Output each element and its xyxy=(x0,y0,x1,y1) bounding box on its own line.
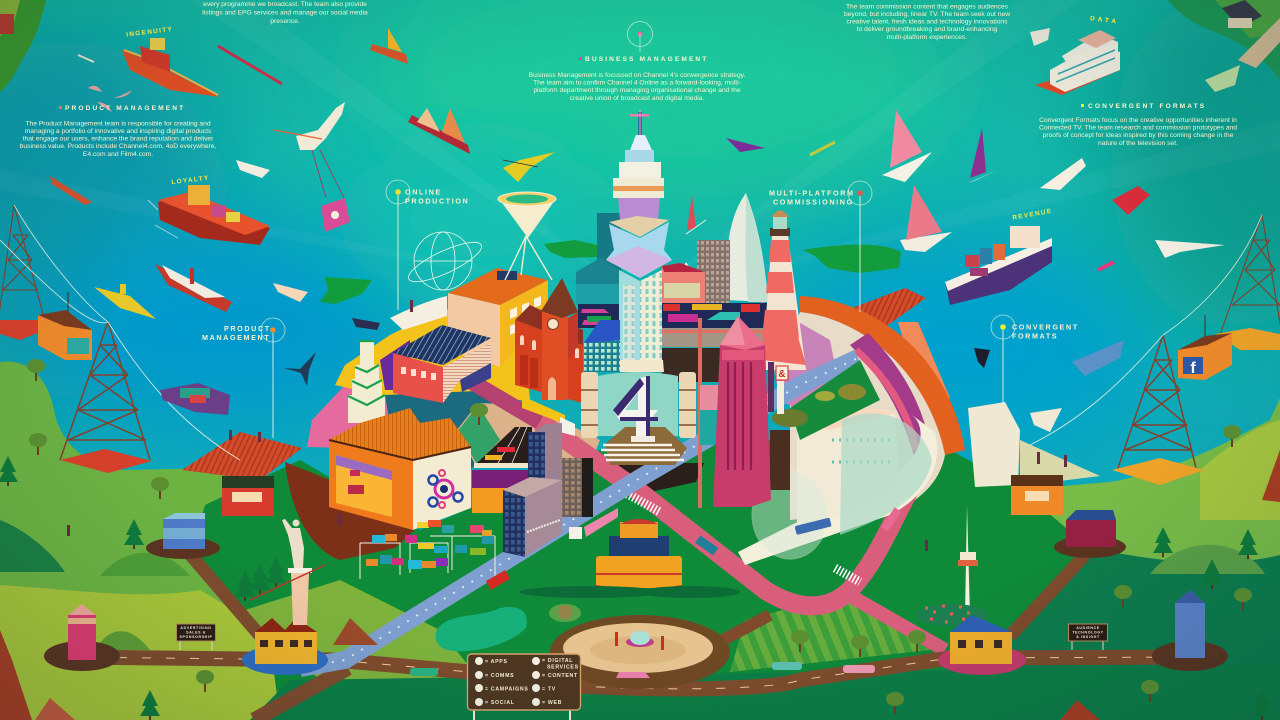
map label: online production: ONLINE xyxy=(405,188,442,196)
building: white stepped tower xyxy=(348,340,385,423)
pedestrians xyxy=(67,300,1067,551)
top text: commissioning body left: listings and EPG services and manage our social media xyxy=(202,10,368,16)
building: orange roof block xyxy=(448,268,548,367)
legend sign: = APPS xyxy=(485,659,508,665)
product management block: managing a portfolio of innovative and inspiring digital products xyxy=(25,128,212,135)
yellow round temple xyxy=(596,519,682,590)
product management block: The Product Management team is responsible for creating and xyxy=(25,120,211,128)
business management block: platform department through managing organisational change and the xyxy=(533,87,741,94)
lattice pylon right lower xyxy=(1112,335,1204,485)
telecom tower xyxy=(958,505,978,622)
node: maroon house xyxy=(1054,510,1126,558)
dome: white road and glass xyxy=(738,405,937,565)
ship: ingenuity xyxy=(122,38,220,97)
building: pink shop xyxy=(662,263,705,303)
convergent formats block: nature of the television set. xyxy=(1098,140,1178,147)
pond xyxy=(436,607,527,651)
sign: advertising sales: SALES & xyxy=(186,630,206,634)
cable car left xyxy=(38,292,92,360)
ship: loyalty xyxy=(148,185,270,245)
top text: multi-platform body right: multi-platform experiences. xyxy=(887,34,967,41)
hedge with flowers xyxy=(520,586,740,622)
small boats left xyxy=(50,46,380,330)
top text: commissioning body left: every programme we broadcast. The team also provide xyxy=(203,1,367,8)
helicopter: white xyxy=(274,102,345,200)
road: blue with dots xyxy=(300,358,858,668)
map label: multi-platform commissioning xyxy=(769,181,872,312)
sailboats xyxy=(370,28,998,252)
ship: product cargo boat xyxy=(160,383,230,415)
cable lines xyxy=(0,205,1262,460)
sign: advertising sales: SPONSORSHIP xyxy=(180,635,212,639)
ship label: data: DATA xyxy=(1090,15,1119,26)
business management block: Business Management is focussed on Channel 4's convergence strategy. xyxy=(529,72,746,79)
building: red brick church with clock xyxy=(515,278,583,403)
road: pink xyxy=(472,382,945,650)
top text: multi-platform body right: to deliver groundbreaking and brand-enhancing xyxy=(857,26,998,33)
lighthouse xyxy=(762,210,806,370)
land: top right corner xyxy=(1168,0,1280,80)
top text: multi-platform body right: The team commission content that engages audiences xyxy=(846,4,1009,10)
research sign: & xyxy=(778,369,786,380)
product management block: E4.com and Film4.com. xyxy=(83,151,153,158)
small vessels right xyxy=(726,28,1240,432)
legend sign: = SOCIAL xyxy=(485,700,515,706)
highway xyxy=(578,303,768,382)
business management block xyxy=(529,22,746,102)
product management block: business value. Products include Channel4.com, 4oD everywhere, xyxy=(20,143,216,150)
right pier structures xyxy=(852,288,1100,487)
land: central green xyxy=(190,440,1280,720)
pink lorry and red van on blue road xyxy=(486,508,718,590)
product management block: that engage our users, enhance the brand reputation and deliver xyxy=(23,136,214,142)
legend sign: = CONTENT xyxy=(542,673,578,679)
sign: audience technology xyxy=(1068,624,1108,650)
column and teal block behind obelisk xyxy=(698,318,790,508)
legend sign: = COMMS xyxy=(485,673,514,679)
business management block: The team aim to confirm Channel 4 Online as a forward-looking, multi- xyxy=(533,80,741,86)
helicopter: yellow xyxy=(503,152,555,182)
island: coast layers xyxy=(285,296,704,560)
yellow lorry on pink road xyxy=(522,396,575,436)
legend sign xyxy=(468,654,580,720)
yellow submarine xyxy=(94,284,156,319)
trees xyxy=(0,359,1272,720)
research sign xyxy=(768,362,788,414)
convergent formats block: CONVERGENT FORMATS xyxy=(1088,103,1206,110)
red striped pier left xyxy=(182,432,302,480)
map label: convergent formats: FORMATS xyxy=(1012,332,1058,340)
product management block xyxy=(20,105,216,158)
top text: commissioning body left: presence. xyxy=(270,18,300,25)
top text: commissioning body left xyxy=(202,1,368,25)
map label: multi-platform commissioning: MULTI-PLATFORM xyxy=(769,188,855,198)
legend sign: = TV xyxy=(542,686,556,692)
ship: white steamer xyxy=(155,264,232,312)
car park and tree xyxy=(470,403,532,468)
water tower dish xyxy=(498,192,556,280)
map label: product management: PRODUCT xyxy=(224,324,271,333)
legend sign: SERVICES xyxy=(547,664,579,670)
ship label: revenue: REVENUE xyxy=(1012,208,1053,222)
sign: audience technology: & INSIGHT xyxy=(1076,635,1100,639)
convergent formats block: proofs of concept for ideas inspired by this coming change in the xyxy=(1043,132,1234,139)
small red and orange roadside cabins xyxy=(222,475,1063,516)
sign: audience technology: AUDIENCE xyxy=(1076,626,1100,630)
legend sign: = CAMPAIGNS xyxy=(485,686,528,692)
dolphins xyxy=(88,86,132,112)
building: grey tower block xyxy=(697,240,730,303)
cars on bottom road xyxy=(410,507,901,676)
convergent formats block xyxy=(1039,103,1237,147)
land: right mainland xyxy=(720,398,1280,720)
map label: product management: MANAGEMENT xyxy=(202,333,270,342)
business management block: BUSINESS MANAGEMENT xyxy=(585,56,708,63)
islands xyxy=(320,240,901,304)
node: pink round tower xyxy=(44,604,120,671)
ground trees near dome xyxy=(772,360,880,440)
Channel 4 glass screen and pillars xyxy=(581,372,696,438)
dome: orange and purple rings xyxy=(760,296,965,520)
convergent formats block: Convergent Formats focus on the creative opportunities inherent in xyxy=(1039,117,1237,124)
map label: multi-platform commissioning: COMMISSIONING xyxy=(773,198,854,206)
statue on plinth xyxy=(282,519,312,625)
top text: multi-platform body right: beyond, but including, linear TV. The team seek out new xyxy=(844,11,1010,18)
building: warehouse with solar roof xyxy=(393,325,491,403)
ship: revenue container ship xyxy=(945,226,1052,305)
lattice pylon left lower xyxy=(60,322,152,473)
land: top left corner xyxy=(0,0,46,92)
map label: convergent formats: CONVERGENT xyxy=(1012,322,1079,332)
sign: audience technology: TECHNOLOGY xyxy=(1072,630,1104,634)
statue hedges and fence xyxy=(235,557,325,601)
product management block: PRODUCT MANAGEMENT xyxy=(65,105,185,112)
rocks xyxy=(0,450,1280,720)
road: bottom brown xyxy=(70,552,1210,720)
building: dark blue and mauve commercial towers xyxy=(503,423,593,557)
building: large market shed with target mural xyxy=(329,408,471,530)
building: teal blocks behind tower xyxy=(576,213,621,304)
sign: advertising sales: ADVERTISING xyxy=(180,626,212,630)
circular plaza with fountain xyxy=(550,615,730,689)
node: blue office xyxy=(146,513,220,559)
convergent formats block: Connected TV. The team research and commission prototypes and xyxy=(1039,124,1237,132)
top text: multi-platform body right xyxy=(844,4,1010,41)
Channel 4 logo xyxy=(613,376,658,442)
map label: convergent formats xyxy=(991,315,1079,404)
cable car right with facebook: f xyxy=(1190,360,1196,377)
lattice pylon right top xyxy=(1216,215,1280,350)
building: blue glass annex xyxy=(584,320,620,372)
map label: product management xyxy=(202,318,285,438)
ship: white cruise liner data xyxy=(1035,30,1120,95)
sign: advertising sales xyxy=(176,624,216,650)
globe wireframe xyxy=(404,232,486,290)
business management block: creative union of broadcast and digital media. xyxy=(570,95,704,102)
node: blue tower xyxy=(1152,590,1228,671)
legend sign: = WEB xyxy=(542,700,562,706)
node: yellow house xyxy=(242,618,328,675)
legend sign: = DIGITAL xyxy=(542,658,573,664)
iceberg xyxy=(683,193,768,302)
ship label: ingenuity: INGENUITY xyxy=(126,26,174,39)
cable car right with facebook xyxy=(1178,315,1232,380)
node: blue roof house xyxy=(938,615,1026,675)
orca and whale tail xyxy=(284,348,990,386)
ship label: loyalty: LOYALTY xyxy=(171,175,210,186)
lattice pylon left top xyxy=(0,205,45,340)
building: glass and white central tower xyxy=(606,110,672,372)
land: left mainland xyxy=(0,362,470,720)
top text: multi-platform body right: creative talent, fresh ideas and technology innovations xyxy=(847,18,1008,26)
map label: online production xyxy=(386,180,469,310)
shelving with coloured crates xyxy=(360,520,495,579)
plinth steps xyxy=(601,427,687,465)
pink parcel xyxy=(321,198,350,232)
obelisk xyxy=(713,316,771,507)
map label: online production: PRODUCTION xyxy=(405,196,469,206)
flowers bed xyxy=(916,604,988,626)
